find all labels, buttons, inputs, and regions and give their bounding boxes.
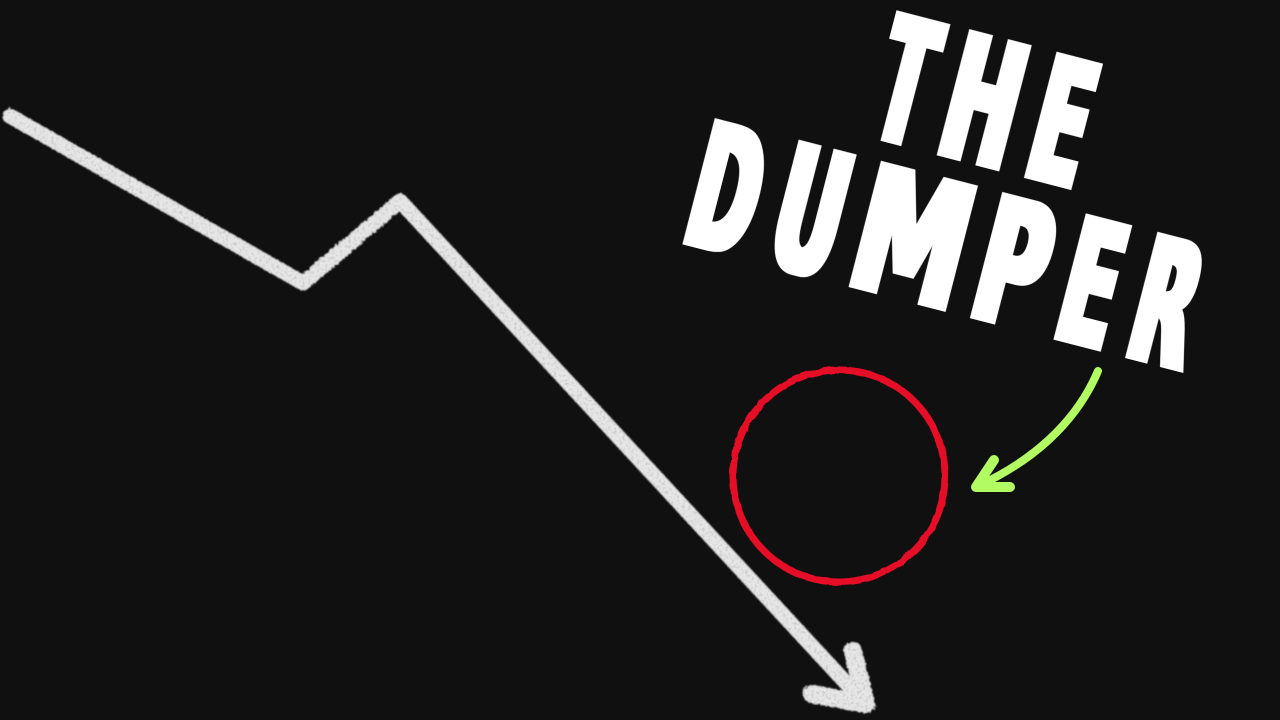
title line: DUMPER: P <box>956 160 1071 371</box>
title line: DUMPER: D <box>670 87 783 297</box>
title line: THE: H <box>923 0 1043 210</box>
title line: THE <box>858 0 1113 229</box>
title line: DUMPER <box>670 87 1221 410</box>
title <box>670 0 1221 410</box>
title line: DUMPER: U <box>753 108 868 319</box>
title line: DUMPER: M <box>833 129 991 351</box>
green curved arrow <box>976 371 1098 487</box>
title line: DUMPER: R <box>1112 201 1220 410</box>
red circle marker <box>733 370 945 582</box>
title line: THE: E <box>1011 20 1113 228</box>
chalk down-trending arrow <box>10 116 866 704</box>
title line: DUMPER: E <box>1041 182 1143 390</box>
